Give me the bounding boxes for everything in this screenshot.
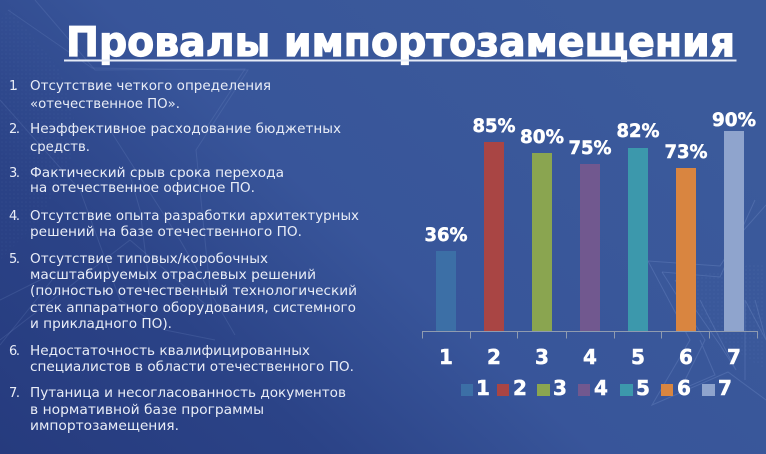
- value labels: 75%: [568, 138, 612, 159]
- value labels: [424, 110, 756, 246]
- legend: 2: [513, 376, 527, 400]
- item 4: [9, 208, 359, 240]
- category labels: 6: [679, 345, 693, 369]
- item 6: Недостаточность квалифицированных: [30, 344, 310, 359]
- category labels: 3: [535, 345, 549, 369]
- item 5: (полностью отечественный технологический: [30, 284, 357, 299]
- value labels: 36%: [424, 225, 468, 246]
- item 5: [9, 251, 357, 332]
- item 5: 5.: [9, 252, 20, 267]
- item 1: 1.: [9, 79, 18, 94]
- item 1: «отечественное ПО».: [30, 97, 180, 112]
- legend: 3: [553, 376, 567, 400]
- item 4: решений на базе отечественного ПО.: [30, 224, 302, 240]
- item 2: [9, 121, 341, 155]
- item 7: [9, 386, 346, 434]
- item 3: [9, 166, 284, 196]
- value labels: 82%: [616, 121, 660, 142]
- legend: 6: [677, 376, 691, 400]
- item 7: 7.: [9, 386, 20, 401]
- item 5: стек аппаратного оборудования, системного: [30, 300, 356, 316]
- category labels: 5: [631, 345, 645, 369]
- list of failures: [9, 79, 359, 434]
- item 4: 4.: [9, 209, 20, 224]
- item 7: в нормативной базе программы: [30, 402, 264, 418]
- category labels: 4: [583, 345, 597, 369]
- bar chart: [422, 110, 758, 369]
- item 4: Отсутствие опыта разработки архитектурных: [30, 208, 359, 224]
- item 5: Отсутствие типовых/коробочных: [30, 251, 268, 267]
- item 7: импортозамещения.: [30, 419, 179, 434]
- item 1: [9, 79, 271, 112]
- item 6: специалистов в области отечественного ПО.: [30, 359, 354, 375]
- axis: [422, 331, 758, 338]
- decorative star left: [0, 0, 248, 345]
- item 2: средств.: [30, 140, 90, 155]
- legend: 1: [476, 376, 490, 400]
- category labels: 7: [727, 345, 741, 369]
- item 3: Фактический срыв срока перехода: [30, 166, 284, 181]
- item 5: масштабируемых отраслевых решений: [30, 267, 316, 283]
- category labels: 1: [439, 345, 453, 369]
- legend: 5: [636, 376, 650, 400]
- bars: [436, 131, 744, 331]
- value labels: 73%: [664, 142, 708, 163]
- legend: 4: [594, 376, 608, 400]
- item 1: Отсутствие четкого определения: [30, 79, 271, 94]
- legend: [461, 376, 732, 400]
- item 6: [9, 344, 354, 375]
- item 5: и прикладного ПО).: [30, 317, 172, 332]
- item 6: 6.: [9, 344, 20, 359]
- item 2: Неэффективное расходование бюджетных: [30, 121, 341, 137]
- decorative star right: [648, 200, 766, 405]
- category labels: 2: [487, 345, 501, 369]
- item 3: 3.: [9, 166, 20, 181]
- value labels: 90%: [712, 110, 756, 131]
- title: Провалы импортозамещения: [66, 18, 735, 66]
- legend: 7: [718, 376, 732, 400]
- value labels: 80%: [520, 127, 564, 148]
- item 7: Путаница и несогласованность документов: [30, 386, 346, 401]
- value labels: 85%: [472, 116, 516, 137]
- category labels: [439, 345, 741, 369]
- item 2: 2.: [9, 122, 20, 137]
- item 3: на отечественное офисное ПО.: [30, 181, 255, 196]
